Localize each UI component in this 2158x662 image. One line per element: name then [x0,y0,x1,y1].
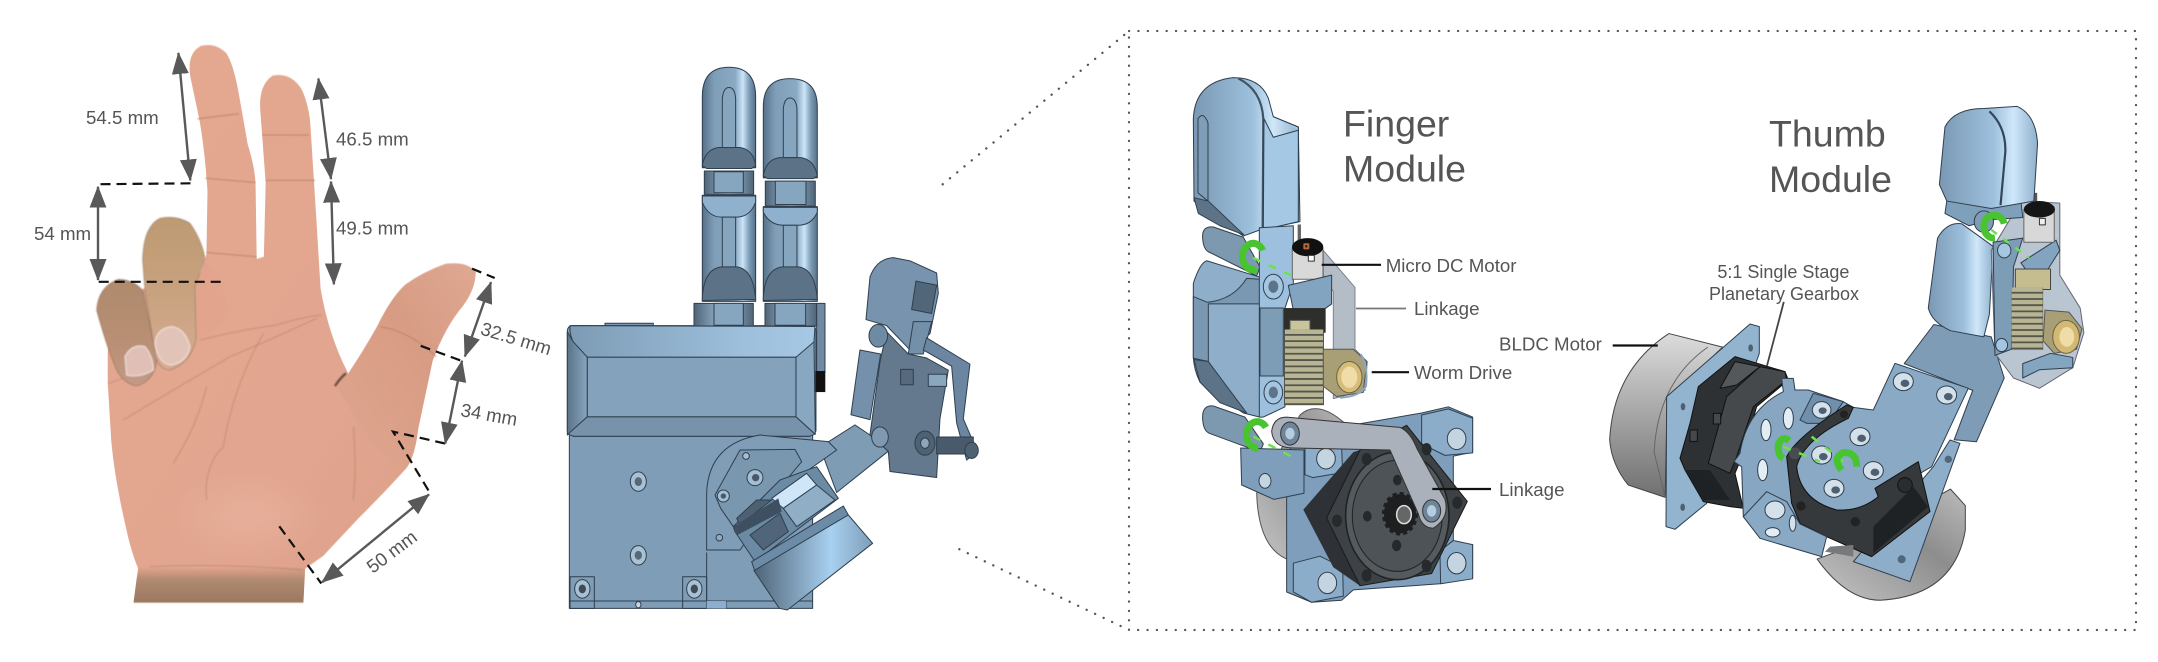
dimension labels: 34 mm [459,399,519,430]
photo: human hand [108,45,476,603]
translucent chassis [1991,201,2084,388]
CAD model: thumb module upper section [1610,106,2084,600]
zoom connector: upper dotted line [943,31,1129,184]
main plate and disk [1797,363,1968,510]
side link and black block [815,303,825,392]
motor cylinder [754,515,873,610]
callout: planetary gearbox: Planetary Gearbox [1709,284,1859,304]
lower joint roller [1203,406,1263,452]
planetary gearbox [1680,357,1788,508]
index finger [694,67,756,326]
hand thumb base and motor [707,435,873,610]
thumb shading [337,263,476,469]
green rotation axes [1243,243,1291,456]
callout: lower Linkage: Linkage [1499,479,1564,500]
palm crease lines [108,315,355,570]
callout: Micro DC Motor: Micro DC Motor [1386,255,1517,276]
thumb motor link [820,425,888,493]
upper arm to main plate [1904,325,2004,442]
dimension labels: 50 mm [363,526,421,577]
front block [1743,492,1827,557]
motor clamp [1288,275,1332,312]
grey linkage arm [1272,417,1446,528]
palm highlights [173,470,327,563]
recessed plate [715,449,802,527]
curled index finger [143,217,205,370]
gearbox carrier [1734,378,1853,537]
detail panel: dotted frame [1129,31,2136,630]
palm creases and curled fingers [97,217,355,570]
dashed reference lines [99,183,495,584]
callout: BLDC Motor: BLDC Motor [1499,333,1602,354]
thumb worm drive [2012,269,2082,378]
motor ring [752,506,848,572]
CAD model: finger module [1193,78,1473,602]
thumb micro motor [2024,193,2055,242]
dimension labels: 32.5 mm [478,318,554,359]
callout: planetary gearbox: 5:1 Single Stage [1717,262,1849,282]
upper housing with top bevel [567,323,816,436]
dimension labels: 49.5 mm [336,218,409,239]
CAD model: full robotic hand [567,67,978,608]
black output bracket [1787,405,1930,557]
BLDC motor [1610,334,1723,497]
gearbox body [733,467,838,562]
green rotation axis [1984,215,2029,258]
title: Thumb Module: Thumb [1769,113,1886,155]
second BLDC motor [1817,489,1965,600]
dimension labels: 54.5 mm [86,107,159,128]
base mount [707,435,837,550]
callout: Worm Drive: Worm Drive [1414,362,1512,383]
hand dimension annotations [34,53,554,584]
web crease [335,373,346,386]
dimension labels [34,107,554,577]
upper finger segment [1928,223,1993,337]
lower housing [569,435,813,608]
mounting plate [1666,324,1759,529]
mount screws [716,453,763,541]
wrist [134,567,305,603]
micro DC motor [1292,225,1323,279]
green rotation axes [1778,437,1857,470]
curled ring finger [97,279,157,386]
finger folds [197,114,436,356]
hexagonal gearbox [1303,425,1467,586]
middle segment [1193,261,1260,417]
lower plate [1853,440,1960,582]
dimension arrows [98,53,491,582]
callout: upper Linkage [1356,298,1479,319]
thumb finger assembly [851,258,978,478]
title: Finger Module [1343,102,1466,189]
thumb tip shell [1939,106,2038,232]
title: Thumb Module [1769,113,1892,200]
middle finger [763,79,817,326]
lower bracket [1241,407,1473,602]
zoom connector: lower dotted line [959,549,1129,630]
fingernails [125,346,153,376]
title: Thumb Module: Module [1769,158,1892,200]
motor behind plate [1257,409,1353,559]
callout: upper Linkage: Linkage [1414,298,1479,319]
gearbox highlights [733,473,835,550]
callout: planetary gearbox [1709,262,1859,366]
fingertip shell [1193,78,1300,236]
CAD model: thumb module base section [1666,324,1968,582]
dimension labels: 46.5 mm [336,129,409,150]
translucent side linkage [1323,250,1367,399]
callout: lower Linkage [1432,479,1564,500]
title: Finger Module: Module [1343,147,1466,189]
title: Finger Module: Finger [1343,102,1449,144]
worm drive [1284,308,1367,405]
palm and extended fingers [108,45,476,603]
dimension labels: 54 mm [34,223,91,244]
palm area below index finger [194,260,230,340]
chassis [1259,226,1293,417]
upper joint roller [1203,227,1260,276]
